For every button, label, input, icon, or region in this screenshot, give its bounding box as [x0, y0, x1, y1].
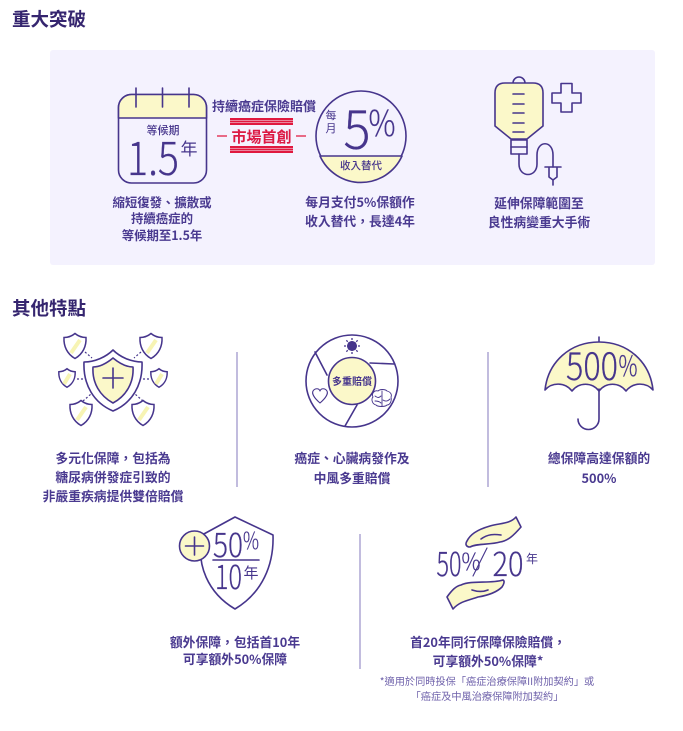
text: companion protection caption: 可享額外50%保障* — [433, 651, 543, 670]
icon: calendar 1.5 years — [118, 88, 206, 188]
text: multiple claims caption — [294, 448, 410, 487]
text: surgery caption: 延伸保障範圍至 — [494, 193, 584, 212]
text: footnote — [380, 673, 594, 703]
icon: calendar 1.5 years: 年 — [180, 135, 198, 160]
icon: 5% income replacement circle: % — [368, 95, 396, 147]
icon: shield 50% 10 years: 年 — [243, 562, 259, 583]
icon: hands with 50% / 20 years: 年 — [526, 550, 538, 567]
icon: shield 50% 10 years — [180, 517, 273, 609]
feature: diversified protection — [43, 334, 184, 505]
icon: virus — [343, 338, 361, 354]
text: waiting period caption: 縮短復發、擴散或 — [112, 193, 212, 211]
text: companion protection caption — [410, 632, 566, 670]
text: waiting period caption: 持續癌症的 — [131, 209, 193, 227]
icon: hands with 50% / 20 years: % — [462, 543, 480, 577]
text: income replacement caption — [305, 192, 415, 230]
icon: hands with 50% / 20 years: 20 — [492, 538, 524, 586]
heading: other features: 其他特點 — [12, 295, 86, 321]
icon: shield 50% 10 years: % — [243, 522, 259, 556]
feature: companion protection — [380, 517, 594, 703]
text: multiple claims caption: 癌症、心臟病發作及 — [294, 448, 410, 467]
icon: calendar 1.5 years: 1.5 — [127, 123, 179, 188]
text: diversified protection caption: 非嚴重疾病提供雙倍賠償 — [43, 486, 184, 505]
icon: hands with 50% / 20 years — [436, 517, 538, 609]
icon: 5% income replacement circle — [316, 89, 406, 182]
icon: umbrella — [545, 336, 653, 430]
text: footnote: *適用於同時投保「癌症治療保障II附加契約」或 — [380, 673, 594, 688]
text: diversified protection caption: 糖尿病併發症引致的 — [55, 467, 171, 486]
text: extra protection caption — [170, 632, 300, 668]
icon: segmented circle — [306, 335, 398, 427]
feature: multiple claims — [294, 335, 410, 487]
icon: hands with 50% / 20 years: 50 — [436, 538, 462, 586]
text: companion protection caption: 首20年同行保障保險賠償， — [410, 632, 566, 651]
callout: market first: 市場首創 — [231, 126, 292, 147]
feature: 500% coverage — [545, 336, 653, 487]
icon: shield 50% 10 years: 50 — [213, 519, 243, 567]
text: multiple claims caption: 中風多重賠償 — [314, 468, 391, 487]
icon: 5% income replacement circle: 每 — [326, 107, 336, 123]
icon: 5% income replacement circle: 5 — [344, 89, 370, 165]
text: surgery caption — [488, 193, 590, 231]
icon: 5% income replacement circle: 月 — [326, 120, 336, 136]
icon: calendar 1.5 years: 等候期 — [146, 122, 180, 138]
icon: umbrella: % — [618, 345, 638, 385]
text: 500% caption: 總保障高達保額的 — [548, 448, 650, 467]
text: footnote: 「癌症及中風治療保障附加契約」 — [411, 688, 563, 703]
icon: shield 50% 10 years: 10 — [215, 551, 242, 599]
text: 500% caption — [548, 448, 650, 487]
callout: market first — [212, 96, 316, 152]
panel: major breakthroughs — [50, 50, 655, 265]
text: diversified protection caption: 多元化保障，包括為 — [55, 448, 171, 467]
icon: brain — [372, 390, 391, 406]
feature: extra protection — [170, 517, 300, 668]
text: income replacement caption: 每月支付5%保額作 — [305, 192, 415, 211]
callout: market first: 持續癌症保險賠償 — [212, 96, 316, 115]
icon: IV drip bag and cross — [495, 77, 581, 185]
text: income replacement caption: 收入替代，長達4年 — [305, 211, 415, 230]
text: waiting period caption: 等候期至1.5年 — [122, 226, 202, 244]
icon: 5% income replacement circle: 收入替代 — [340, 158, 382, 173]
heading: major breakthrough: 重大突破 — [12, 6, 86, 32]
text: 500% caption: 500% — [582, 468, 616, 487]
text: diversified protection caption — [43, 448, 184, 505]
icon: shield network — [59, 334, 167, 426]
text: extra protection caption: 額外保障，包括首10年 — [170, 632, 300, 651]
text: extra protection caption: 可享額外50%保障 — [183, 649, 287, 668]
icon: heart — [313, 389, 327, 403]
icon: segmented circle: 多重賠償 — [332, 373, 372, 388]
text: surgery caption: 良性病變重大手術 — [488, 212, 590, 231]
icon: umbrella: 500 — [566, 336, 618, 391]
text: waiting period caption — [112, 193, 212, 244]
